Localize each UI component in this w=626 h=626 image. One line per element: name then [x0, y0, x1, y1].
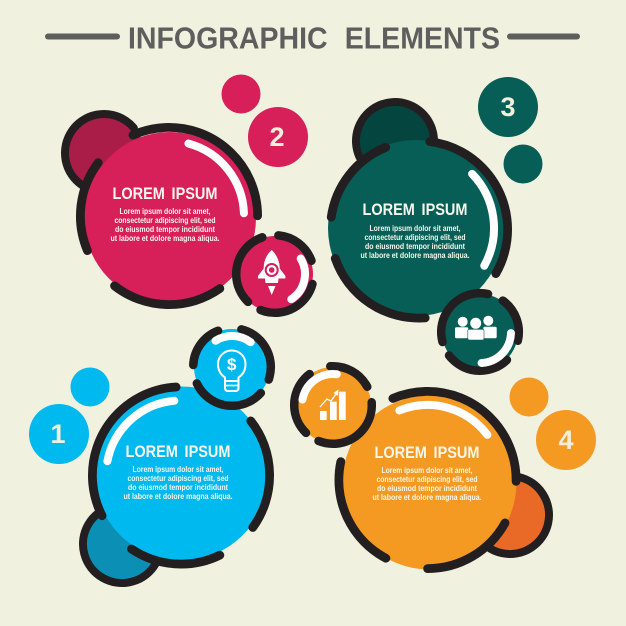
icon: growth chart — [320, 390, 346, 420]
text block: step 4: ut labore et dolore magna aliqua. — [372, 493, 482, 502]
text block: step 1: consectetur adipiscing elit, sed — [128, 474, 228, 483]
text block: step 2: ut labore et dolore magna aliqua. — [110, 234, 220, 243]
text block: step 3: do eiusmod tempor incididunt — [365, 242, 465, 251]
text block: step 3: ut labore et dolore magna aliqua. — [360, 251, 470, 260]
text block: step 1: do eiusmod tempor incididunt — [128, 483, 228, 492]
text block: step 2: do eiusmod tempor incididunt — [115, 225, 215, 234]
icon: dollar light bulb: $ — [227, 355, 237, 374]
heading: step 3: LOREM IPSUM — [362, 201, 468, 219]
number badge: 1: 1 — [50, 419, 66, 449]
text block: step 1: Lorem ipsum dolor sit amet, — [132, 465, 224, 474]
icon circle: people — [425, 277, 535, 387]
decorative dot: teal — [504, 144, 542, 184]
icon circle: growth chart — [278, 350, 388, 460]
heading: step 2: LOREM IPSUM — [112, 185, 218, 203]
number badge: 4: 4 — [558, 425, 574, 455]
number badge: 1 — [29, 404, 89, 464]
text block: step 4: consectetur adipiscing elit, sed — [376, 475, 478, 484]
decorative dot: pink — [222, 74, 260, 114]
text block: step 2 — [110, 207, 220, 243]
number badge: 2: 2 — [269, 122, 285, 152]
panel: step 1 blue — [29, 312, 305, 600]
panel: step 2 pink — [46, 74, 330, 339]
heading: step 4: LOREM IPSUM — [374, 444, 480, 462]
icon circle: light bulb — [177, 312, 287, 422]
heading: step 1: LOREM IPSUM — [126, 443, 230, 461]
text block: step 2: Lorem ipsum dolor sit amet, — [120, 207, 210, 216]
icon: people — [455, 316, 497, 340]
icon: rocket — [258, 250, 285, 295]
text block: step 4: Lorem ipsum dolor sit amet, — [382, 466, 472, 475]
text block: step 3: Lorem ipsum dolor sit amet, — [370, 224, 460, 233]
number badge: 2 — [248, 107, 308, 167]
number badge: 3 — [478, 77, 538, 137]
text block: step 1 — [124, 465, 232, 501]
text block: step 1: ut labore et dolore magna aliqua. — [124, 492, 232, 501]
title: INFOGRAPHIC ELEMENTS — [128, 20, 500, 56]
text block: step 4 — [372, 466, 482, 502]
text block: step 3: consectetur adipiscing elit, sed — [364, 233, 466, 242]
text block: step 4: do eiusmod tempor incididunt — [377, 484, 477, 493]
text block: step 3 — [360, 224, 470, 260]
decorative dot: blue — [70, 368, 110, 406]
decorative dot: orange — [510, 378, 548, 416]
number badge: 4 — [536, 410, 596, 470]
number badge: 3: 3 — [500, 92, 516, 122]
panel: step 4 orange — [278, 350, 596, 600]
panel: step 3 teal — [306, 77, 542, 387]
icon circle: rocket — [220, 219, 330, 329]
text block: step 2: consectetur adipiscing elit, sed — [114, 216, 216, 225]
